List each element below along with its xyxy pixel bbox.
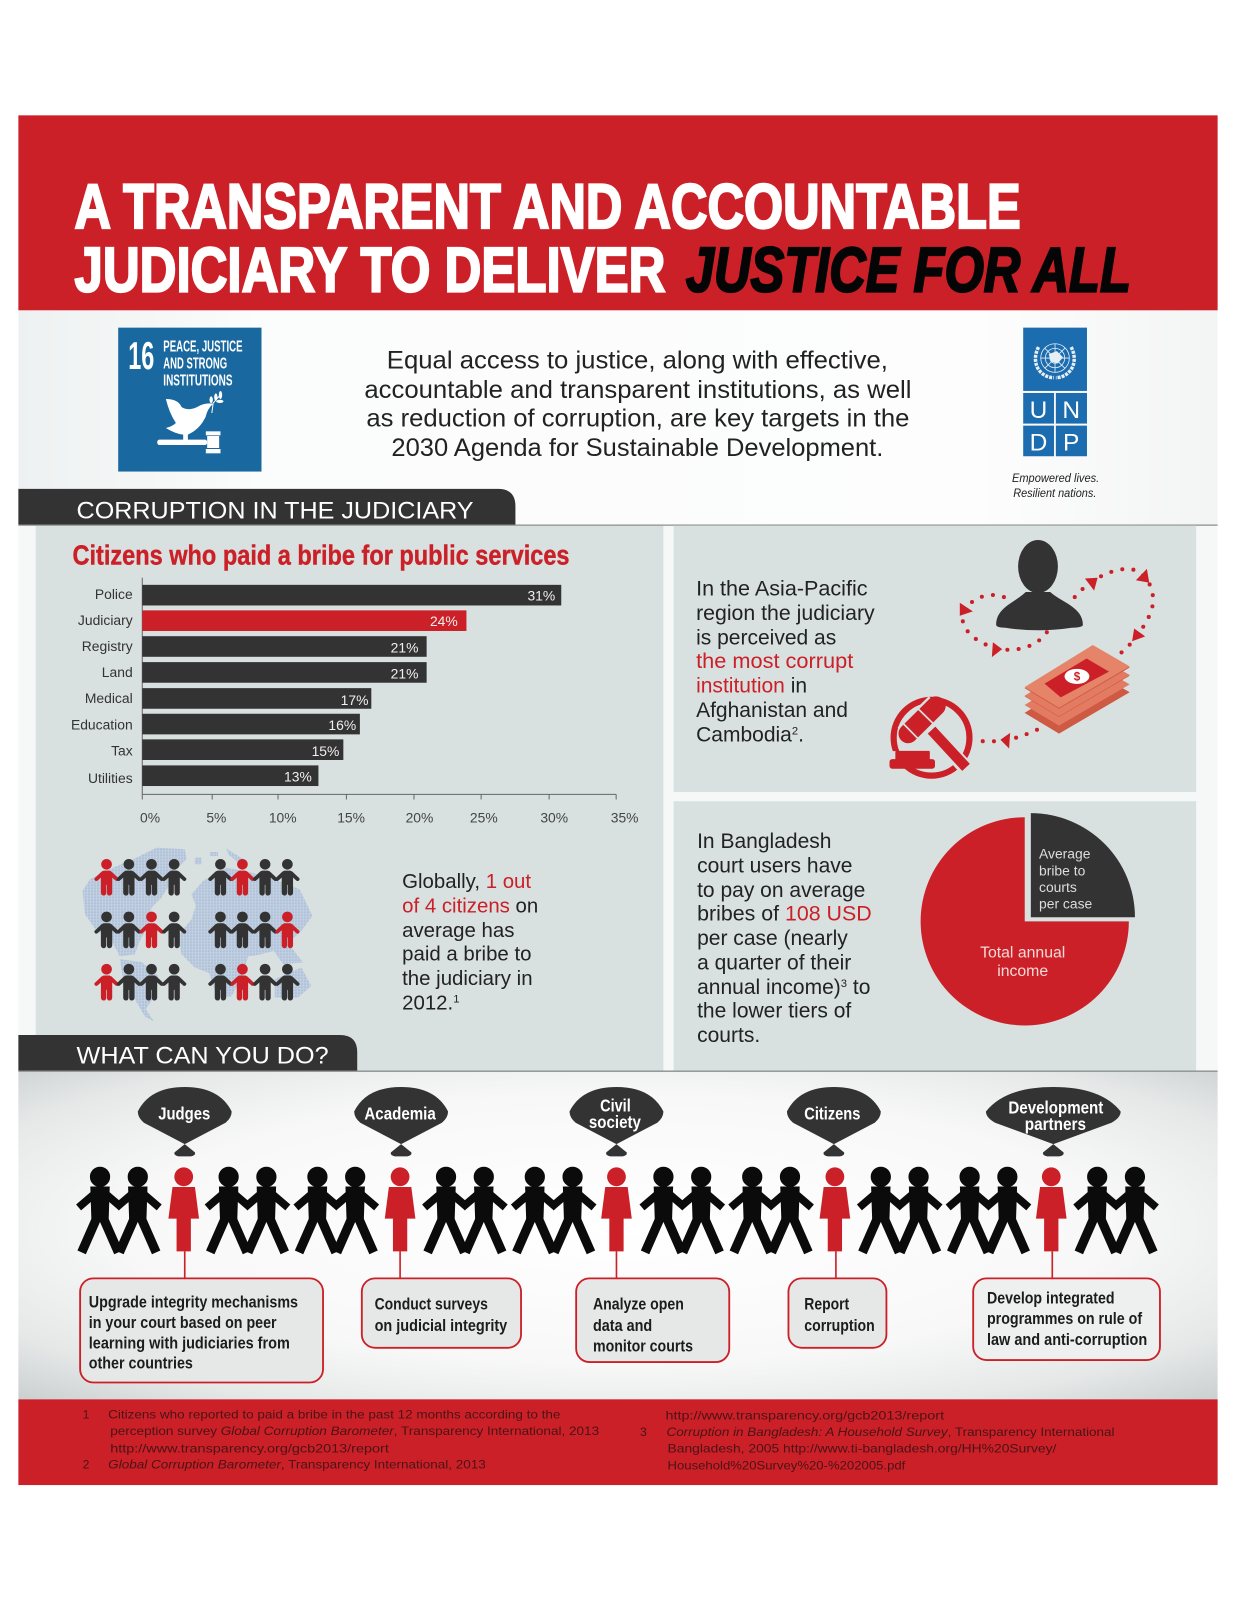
action box: judges: [80, 1278, 323, 1382]
title: [75, 172, 1131, 305]
icon: banknotes: $: [1074, 671, 1081, 684]
text: most corrupt institution: Cambodia: [696, 724, 792, 747]
action box: academia: [362, 1278, 521, 1348]
icon: UNDP logo: Empowered lives.: [1012, 471, 1099, 485]
text: 108 USD bribes: annual income): [697, 976, 841, 999]
action box: judges: in your court based on peer: [89, 1314, 277, 1332]
icon: UNDP logo: Resilient nations.: [1013, 486, 1096, 500]
speech bubble: Judges: Judges: [158, 1104, 210, 1124]
action box: civil society: data and: [593, 1317, 652, 1335]
bar chart: Education: [71, 716, 133, 732]
text: most corrupt institution: region the judiciary: [696, 602, 875, 625]
bar chart: Police: [95, 586, 133, 602]
text: 108 USD bribes: to pay on average: [697, 879, 865, 902]
text: most corrupt institution: institution in: [696, 675, 807, 698]
icon: SDG 16 badge: 16: [128, 335, 154, 378]
action box: civil society: monitor courts: [593, 1337, 693, 1355]
bar chart: 20%: [406, 810, 433, 826]
action box: development partners: Develop integrated: [987, 1289, 1115, 1307]
pie chart: Average: [1039, 845, 1091, 861]
pie chart: income: [997, 963, 1048, 980]
intro text: as reduction of corruption, are key targets in the: [366, 405, 909, 433]
header banner: [18, 115, 1218, 310]
icon: SDG 16 badge: INSTITUTIONS: [163, 372, 233, 389]
bar chart: Tax: [111, 742, 133, 758]
arrows: dotted bribe cycle: [960, 569, 1153, 748]
intro text: Equal access to justice, along with effective,: [387, 346, 888, 374]
heading tab: corruption in the judiciary: CORRUPTION IN THE JUDICIARY: [77, 498, 474, 525]
pie chart: per case: [1039, 895, 1093, 911]
text: globally 1 out of 4: of 4 citizens on: [402, 895, 538, 917]
action box: citizens: [788, 1278, 886, 1348]
action box: academia: on judicial integrity: [375, 1317, 507, 1335]
text: globally 1 out of 4: the judiciary in: [402, 968, 533, 990]
people: one in four highlighted: [94, 859, 300, 1000]
bar chart: Medical: [85, 690, 133, 706]
speech bubble: Academia: [354, 1087, 448, 1156]
heading tab: corruption in the judiciary: [18, 489, 1218, 525]
icon: UNDP logo: D: [1030, 430, 1047, 457]
bar chart: Land: [102, 664, 133, 680]
pie chart: [921, 813, 1135, 1025]
speech bubble: Development partners: [986, 1087, 1121, 1156]
text: 108 USD bribes: a quarter of their: [697, 952, 851, 975]
footnotes left: perception survey Global Corruption Barometer , Transparency International, 2013: [110, 1424, 599, 1438]
action box: judges: Upgrade integrity mechanisms: [89, 1293, 298, 1311]
pie chart: bribe to: [1039, 863, 1086, 879]
text: most corrupt institution: is perceived as: [696, 627, 836, 650]
text: most corrupt institution: In the Asia-Pacific: [696, 578, 868, 601]
text: 108 USD bribes: to: [847, 976, 870, 999]
panel: citizens who paid a bribe: [36, 526, 663, 1072]
speech bubble: Civil society: Civil: [600, 1096, 631, 1116]
speech bubble: Development partners: Development: [1008, 1098, 1103, 1118]
text: 108 USD bribes: bribes of 108 USD: [697, 903, 872, 926]
icon: UNDP logo: U: [1030, 397, 1047, 424]
bar chart: Registry: [82, 638, 133, 654]
footnotes right: [640, 1409, 1115, 1473]
action box: judges: other countries: [89, 1355, 193, 1373]
icon: UNDP logo: [1012, 328, 1099, 500]
footnotes right: Household%20Survey%20-%202005.pdf: [668, 1459, 906, 1473]
bar chart: 30%: [540, 810, 568, 826]
bar chart: 5%: [206, 810, 226, 826]
speech bubble: Academia: Academia: [364, 1104, 436, 1124]
intro text: accountable and transparent institutions, as well: [364, 376, 911, 404]
row of people: [79, 1167, 1156, 1278]
footnotes left: 2: [83, 1458, 90, 1472]
bar chart: 21%: [391, 640, 418, 656]
icon: UNDP logo: P: [1063, 430, 1079, 457]
action box: development partners: [973, 1278, 1160, 1360]
bar chart: 16%: [328, 717, 356, 733]
bar chart: 13%: [284, 768, 312, 784]
footnotes left: Citizens who reported to paid a bribe in the past 12 months according to the: [108, 1408, 561, 1422]
footer panel with references: [18, 1399, 1218, 1485]
bar chart: 24%: [430, 613, 458, 629]
title: A TRANSPARENT AND ACCOUNTABLE: [75, 172, 1021, 242]
footnotes left: Global Corruption Barometer , Transparency International, 2013: [108, 1458, 486, 1472]
action box: civil society: [576, 1278, 729, 1362]
bar chart: [71, 578, 639, 826]
footnotes right: Corruption in Bangladesh: A Household Survey , Transparency International: [666, 1425, 1115, 1439]
bar chart: 17%: [341, 692, 368, 708]
world map with people: [83, 848, 312, 1021]
heading tab: what can you do: WHAT CAN YOU DO?: [77, 1043, 329, 1070]
text: most corrupt institution: .: [798, 724, 804, 747]
icon: SDG 16 badge: AND STRONG: [163, 355, 227, 372]
chart heading: Citizens who paid a bribe for public services: [72, 539, 570, 570]
bar chart: Judiciary: [78, 612, 133, 628]
bar chart: 10%: [269, 810, 297, 826]
footnotes left: http://www.transparency.org/gcb2013/report: [110, 1441, 390, 1455]
text: 108 USD bribes: [697, 830, 872, 1047]
bar chart: Utilities: [88, 770, 133, 786]
pie chart: Total annual: [980, 944, 1065, 961]
speech bubble: Judges: [138, 1087, 232, 1156]
action box: civil society: Analyze open: [593, 1296, 684, 1314]
icon: gavel: [888, 700, 969, 776]
speech bubble: Citizens: [787, 1087, 881, 1156]
footnotes left: 1: [83, 1408, 90, 1422]
text: globally 1 out of 4: 2012.: [402, 992, 453, 1014]
bar chart: 15%: [337, 810, 365, 826]
text: 108 USD bribes: 3: [841, 978, 847, 990]
text: 108 USD bribes: the lower tiers of: [697, 1000, 851, 1023]
text: most corrupt institution: the most corrupt: [696, 650, 853, 673]
text: globally 1 out of 4: 1: [453, 993, 459, 1005]
text: globally 1 out of 4: [402, 871, 538, 1014]
bar chart: 0%: [140, 810, 160, 826]
footnotes left: [83, 1408, 599, 1472]
bar chart: 31%: [527, 588, 555, 604]
speech bubble: Civil society: [570, 1087, 663, 1156]
page background: [18, 310, 1218, 1399]
intro text: 2030 Agenda for Sustainable Development.: [391, 434, 883, 462]
title: JUDICIARY TO DELIVER: [75, 235, 665, 305]
text: most corrupt institution: 2: [792, 725, 798, 737]
action box: judges: learning with judiciaries from: [89, 1334, 290, 1352]
panel: Bangladesh: [674, 801, 1196, 1071]
text: 108 USD bribes: per case (nearly: [697, 927, 848, 950]
action box: citizens: Report: [804, 1296, 850, 1314]
panel: Asia-Pacific: [674, 526, 1196, 792]
action box: academia: Conduct surveys: [375, 1296, 488, 1314]
icon: SDG 16 badge: PEACE, JUSTICE: [163, 338, 243, 355]
action box: citizens: corruption: [804, 1317, 875, 1335]
text: 108 USD bribes: courts.: [697, 1024, 760, 1047]
icon: banknotes: [1025, 645, 1130, 734]
text: globally 1 out of 4: Globally, 1 out: [402, 871, 531, 893]
speech bubble: Civil society: society: [589, 1112, 641, 1132]
text: 108 USD bribes: court users have: [697, 855, 852, 878]
speech bubble: Citizens: Citizens: [804, 1104, 860, 1124]
text: most corrupt institution: [696, 578, 875, 747]
action box: development partners: programmes on rule of: [987, 1310, 1143, 1328]
heading tab: what can you do: [18, 1035, 1218, 1071]
footnotes right: 3: [640, 1425, 647, 1439]
icon: UNDP logo: N: [1062, 397, 1080, 424]
title: JUSTICE FOR ALL: [686, 235, 1131, 305]
map: [83, 848, 312, 1021]
pie chart: courts: [1039, 879, 1077, 895]
action box: development partners: law and anti-corruption: [987, 1331, 1147, 1349]
text: globally 1 out of 4: paid a bribe to: [402, 943, 531, 965]
text: 108 USD bribes: In Bangladesh: [697, 830, 831, 853]
bar chart: 35%: [611, 810, 639, 826]
text: most corrupt institution: Afghanistan and: [696, 699, 848, 722]
bar chart: 25%: [470, 810, 498, 826]
footnotes right: http://www.transparency.org/gcb2013/report: [665, 1409, 945, 1423]
bar chart: 21%: [391, 666, 418, 682]
icon: person: [996, 540, 1083, 630]
speech bubble: Development partners: partners: [1025, 1114, 1086, 1134]
text: globally 1 out of 4: average has: [402, 920, 514, 942]
icon: SDG 16 badge: [118, 328, 261, 472]
intro text: [364, 346, 911, 462]
bar chart: 15%: [312, 743, 339, 759]
footnotes right: Bangladesh, 2005 http://www.ti-bangladesh.org/HH%20Survey/: [668, 1441, 1057, 1455]
